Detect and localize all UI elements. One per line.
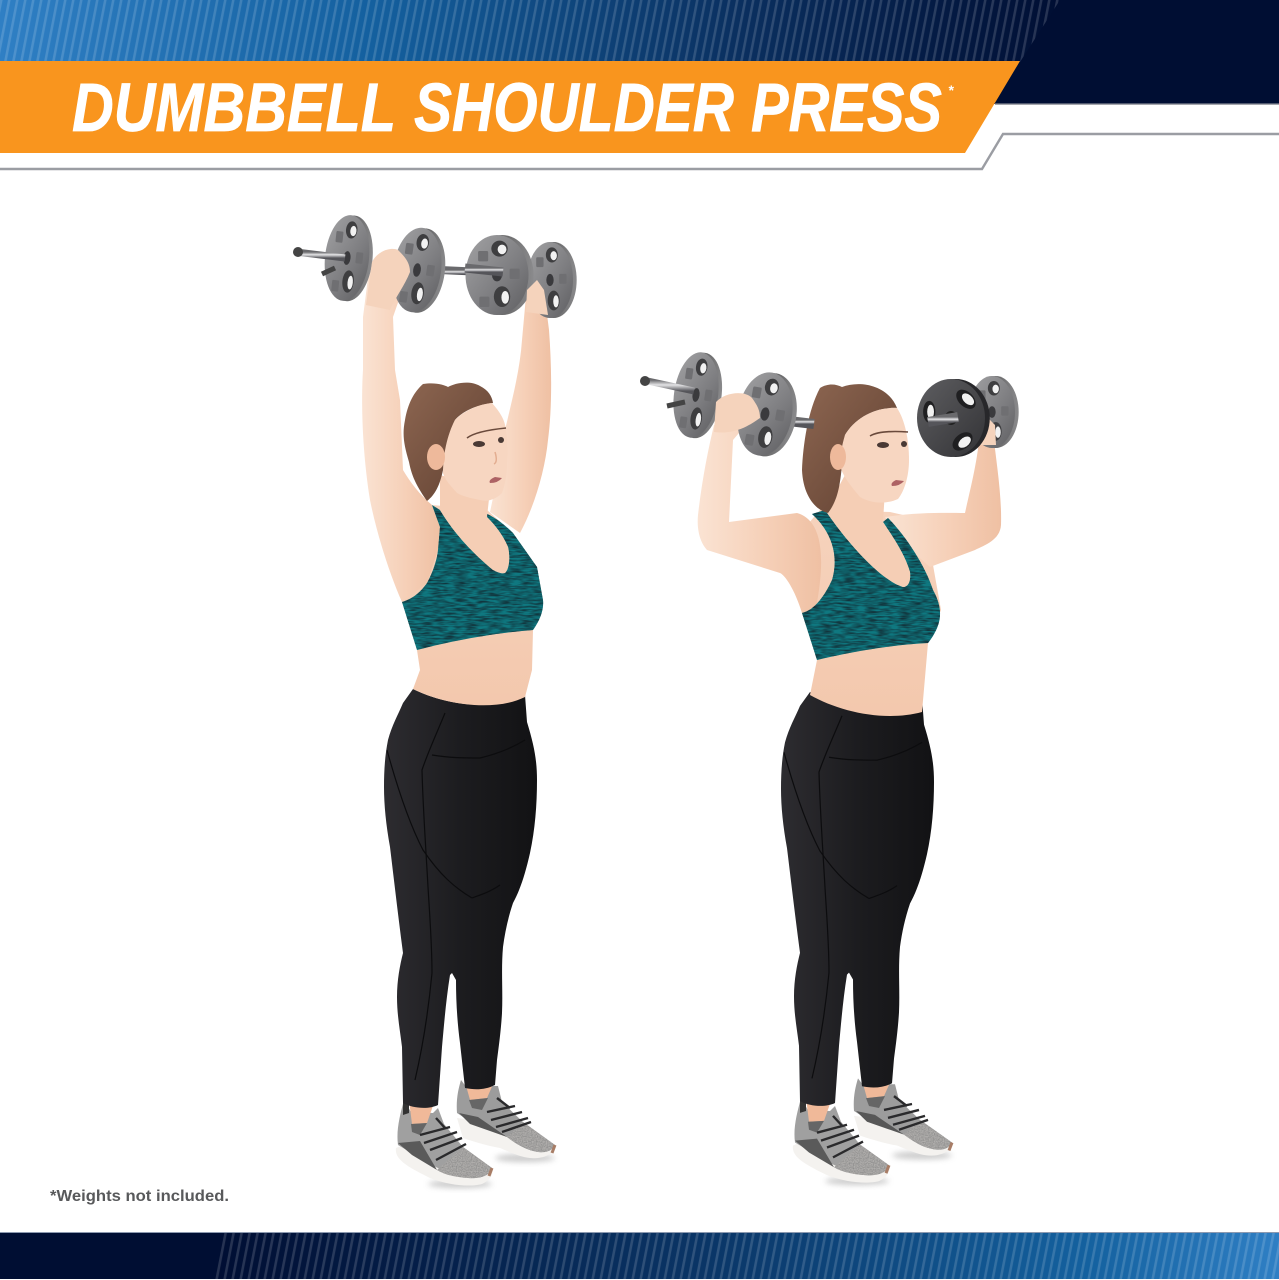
left hand back — [375, 250, 408, 285]
left arm — [362, 262, 440, 602]
bra — [402, 505, 543, 650]
right dumbbell — [917, 376, 1019, 457]
header rule — [995, 104, 1279, 105]
left hand back — [722, 392, 758, 418]
figure: arms fully extended — [293, 213, 577, 1188]
dumbbell — [293, 213, 577, 318]
hair — [404, 383, 493, 501]
right arm — [490, 283, 551, 533]
footnote: *Weights not included. — [50, 1188, 229, 1205]
left hand — [714, 393, 760, 433]
lower body — [384, 689, 555, 1188]
bra — [802, 510, 940, 660]
torso — [390, 505, 543, 705]
head — [802, 384, 909, 513]
title — [72, 69, 942, 146]
neck — [826, 475, 910, 587]
right hand — [980, 415, 996, 445]
figure: dumbbells at shoulder height — [640, 349, 1019, 1185]
neck — [440, 475, 509, 573]
right arm — [885, 430, 1001, 567]
head — [404, 383, 508, 501]
face — [443, 403, 508, 501]
header blue striped gradient — [0, 0, 1060, 62]
left dumbbell — [640, 349, 814, 461]
header outline — [0, 134, 1279, 169]
lower body — [781, 692, 952, 1185]
hair — [802, 384, 897, 513]
footer banner — [0, 1232, 1279, 1279]
white strip below navy — [985, 104, 1279, 170]
orange title band — [0, 61, 1020, 153]
title: SHOULDER — [414, 69, 734, 146]
title: PRESS — [751, 69, 942, 146]
hands — [366, 249, 548, 315]
torso — [790, 510, 941, 716]
title asterisk: * — [948, 82, 954, 98]
left arm — [698, 420, 821, 613]
header banner — [0, 0, 1279, 170]
header navy block — [0, 0, 1279, 104]
title: DUMBBELL — [72, 69, 396, 146]
face — [840, 408, 909, 503]
